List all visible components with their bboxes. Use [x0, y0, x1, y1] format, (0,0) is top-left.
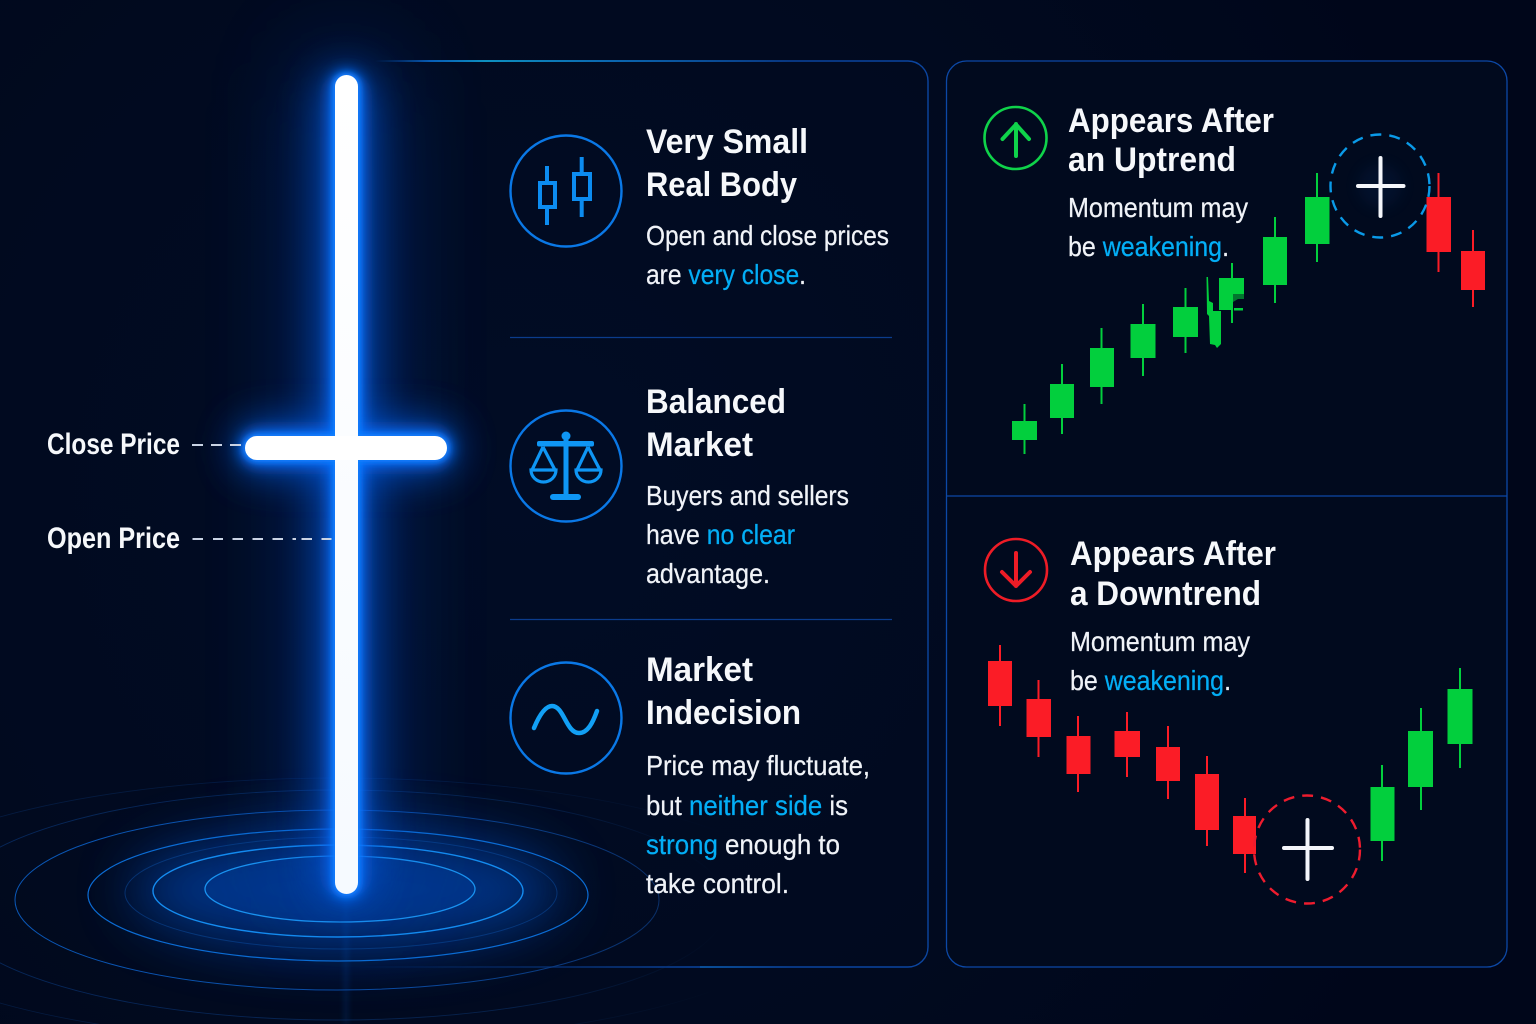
- text block: very small real body: are very close.: [646, 259, 806, 290]
- text block: market indecision: take control.: [646, 868, 789, 899]
- doji candle with glow: [235, 60, 457, 900]
- text block: balanced market: Market: [646, 426, 753, 464]
- text block: market indecision: Market: [646, 651, 753, 689]
- text block: downtrend: Appears After: [1070, 535, 1276, 573]
- text block: uptrend: an Uptrend: [1068, 141, 1236, 179]
- text block: market indecision: [646, 651, 870, 899]
- icon: up arrow: [984, 107, 1046, 169]
- text block: downtrend: be weakening.: [1070, 665, 1231, 696]
- chart: downtrend candles: [988, 645, 1472, 873]
- icon: sine wave: [510, 662, 622, 774]
- text block: downtrend: a Downtrend: [1070, 575, 1261, 613]
- icon: candlesticks: [510, 136, 622, 246]
- text block: balanced market: Buyers and sellers: [646, 480, 849, 511]
- text block: very small real body: Very Small: [646, 123, 808, 161]
- text block: uptrend: [1068, 102, 1274, 262]
- floor ripple rings: [0, 778, 812, 1024]
- text block: very small real body: Open and close prices: [646, 220, 889, 251]
- text block: market indecision: Price may fluctuate,: [646, 750, 870, 781]
- icon: balance scale: [510, 410, 622, 522]
- text block: downtrend: Momentum may: [1070, 626, 1250, 657]
- panel: market context: [946, 61, 1507, 967]
- text block: balanced market: [646, 383, 849, 589]
- text block: balanced market: Balanced: [646, 383, 786, 421]
- text block: market indecision: strong enough to: [646, 829, 840, 860]
- text block: downtrend: [1070, 535, 1276, 696]
- panel: characteristics: [350, 61, 928, 967]
- label: open price: Open Price: [47, 522, 180, 555]
- text block: uptrend: Appears After: [1068, 102, 1274, 140]
- label: close price: Close Price: [47, 428, 180, 461]
- text block: market indecision: but neither side is: [646, 790, 848, 821]
- text block: uptrend: Momentum may: [1068, 192, 1248, 223]
- text block: balanced market: advantage.: [646, 558, 770, 589]
- icon: down arrow: [985, 539, 1047, 601]
- text block: market indecision: Indecision: [646, 694, 801, 732]
- text block: uptrend: be weakening.: [1068, 231, 1229, 262]
- chart: uptrend candles: [1012, 173, 1485, 454]
- callout: downtrend doji: [1254, 796, 1360, 904]
- text block: very small real body: Real Body: [646, 166, 797, 204]
- callout: uptrend doji: [1330, 134, 1430, 238]
- text block: very small real body: [646, 123, 889, 290]
- text block: balanced market: have no clear: [646, 519, 795, 550]
